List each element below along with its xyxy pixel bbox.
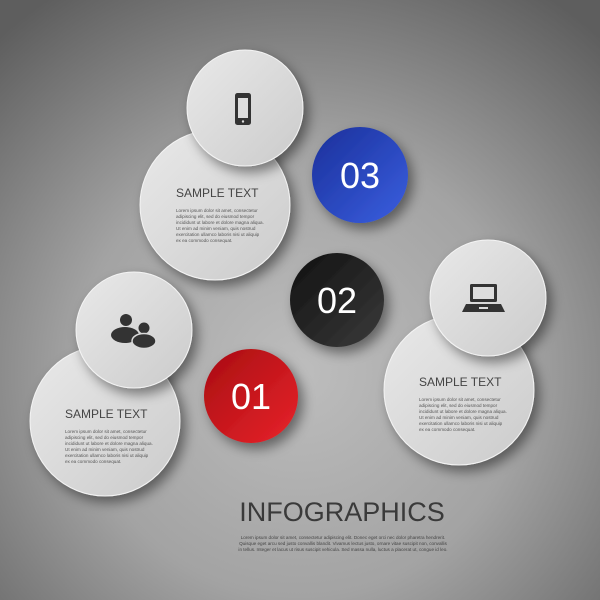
title: INFOGRAPHICS <box>239 497 445 527</box>
group: left (people) <box>30 272 192 496</box>
text block: right: adipiscing elit, sed do eiusmod tempor <box>419 403 498 408</box>
text block: left: adipiscing elit, sed do eiusmod tempor <box>65 435 144 440</box>
circle: top small <box>187 50 303 166</box>
circle: left big <box>30 346 180 496</box>
circle: right big <box>384 315 534 465</box>
group: top (phone) <box>140 50 303 280</box>
icon: laptop <box>462 284 505 312</box>
badge: 03: 03 <box>340 155 380 196</box>
text block: top: SAMPLE TEXT <box>176 186 259 200</box>
text block: left: Lorem ipsum dolor sit amet, consectetur <box>65 429 147 434</box>
text block: left: incididunt ut labore et dolore magna aliqua. <box>65 441 153 446</box>
text block: left: SAMPLE TEXT <box>65 407 148 421</box>
text block: right: incididunt ut labore et dolore magna aliqua. <box>419 409 507 414</box>
icon: people <box>111 314 156 348</box>
text block: left: Ut enim ad minim veniam, quis nostrud <box>65 447 145 452</box>
text block: right: SAMPLE TEXT <box>419 375 502 389</box>
text block: top: Lorem ipsum dolor sit amet, consectetur <box>176 208 258 213</box>
text block: top <box>176 186 264 243</box>
badge: 01: 01 <box>231 376 271 417</box>
text block: footer <box>238 535 448 552</box>
badge: 03 <box>312 127 408 223</box>
badge: 02 <box>290 253 384 347</box>
text block: right: Ut enim ad minim veniam, quis nostrud <box>419 415 499 420</box>
text block: right: ex ea commodo consequat. <box>419 427 475 432</box>
text block: left: exercitation ullamco laboris nisi ut aliquip <box>65 453 149 458</box>
text block: top: incididunt ut labore et dolore magna aliqua. <box>176 220 264 225</box>
circle: left small <box>76 272 192 388</box>
text block: left: ex ea commodo consequat. <box>65 459 121 464</box>
text block: footer: Quisque eget arcu sed justo convallis blandit. Vivamus lectus justo, ornare vitae suscipit non, convallis <box>239 541 448 546</box>
text block: footer: Lorem ipsum dolor sit amet, consectetur adipiscing elit. Donec eget orci nec dolor pharetra hendrerit. <box>241 535 445 540</box>
circle: top big <box>140 130 290 280</box>
text block: right <box>419 375 507 432</box>
text block: left <box>65 407 153 464</box>
badge: 01 <box>204 349 298 443</box>
group: right (laptop) <box>384 240 546 465</box>
icon: phone <box>235 93 251 125</box>
text block: top: Ut enim ad minim veniam, quis nostrud <box>176 226 256 231</box>
text block: top: exercitation ullamco laboris nisi ut aliquip <box>176 232 260 237</box>
badge: 02: 02 <box>317 280 357 321</box>
text block: right: exercitation ullamco laboris nisi ut aliquip <box>419 421 503 426</box>
text block: top: ex ea commodo consequat. <box>176 238 232 243</box>
text block: right: Lorem ipsum dolor sit amet, consectetur <box>419 397 501 402</box>
text block: top: adipiscing elit, sed do eiusmod tempor <box>176 214 255 219</box>
circle: right small <box>430 240 546 356</box>
text block: footer: in tellus. Integer et lacus ut risus suscipit vehicula. Sed massa nulla, luctus a placerat ut, congue id leo. <box>238 547 448 552</box>
